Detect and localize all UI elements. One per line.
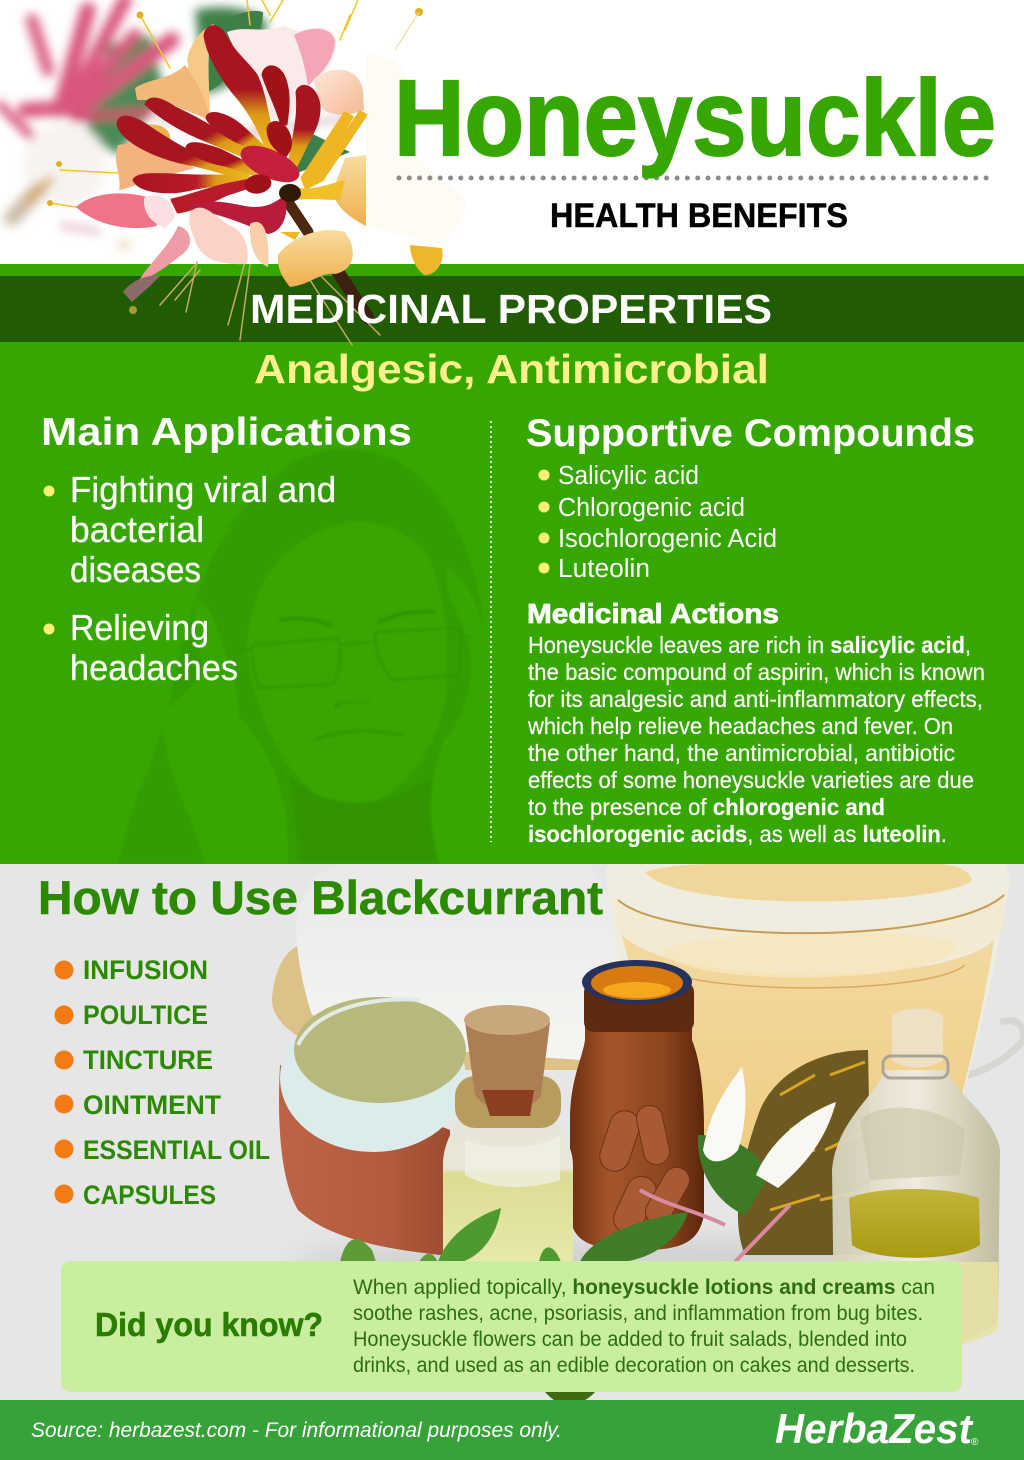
soft shadow: [290, 1238, 990, 1286]
bullet: fighting viral and bacterial diseases: [44, 469, 336, 590]
footer: [0, 1400, 1024, 1460]
callout text: drinks, and used as an edible decoration on cakes and desserts.: [353, 1353, 915, 1377]
illustration: remedies still life: [272, 864, 1024, 1406]
ointment jar: [279, 997, 466, 1256]
medicinal actions paragraph: for its analgesic and anti-inflammatory effects,: [528, 686, 983, 712]
pale curled petals: [189, 208, 248, 264]
peach petals right: [313, 70, 364, 115]
compound list: Salicylic acid: [558, 462, 699, 490]
corked oil bottle: [443, 1005, 573, 1262]
glass bottle with cork: [832, 1008, 1000, 1348]
stem and stamens: [50, 0, 380, 345]
leaf lower: [292, 128, 350, 175]
item: capsules: CAPSULES: [83, 1180, 216, 1210]
medicinal actions paragraph: the basic compound of aspirin, which is known: [528, 659, 985, 685]
pale petals top: [227, 26, 336, 120]
pink lower petals: [76, 193, 157, 228]
bullet: fighting viral and bacterial diseases: Fighting viral and: [70, 469, 336, 510]
leaf under callout: [545, 1392, 595, 1406]
heading: main applications: Main Applications: [41, 411, 412, 454]
panel: medicinal properties background: [0, 264, 1024, 864]
compound list: Isochlorogenic Acid: [558, 525, 777, 553]
blurred background honeysuckle flower: [0, 0, 345, 250]
medicinal actions paragraph: isochlorogenic acids, as well as luteolin.: [528, 821, 947, 847]
red flower buds: [118, 27, 319, 212]
cloth poultice: [296, 864, 625, 1060]
peach petals left: [116, 142, 195, 190]
compound list: [538, 462, 777, 583]
centre of flower: [279, 184, 301, 202]
medicinal actions paragraph: which help relieve headaches and fever. On: [527, 713, 953, 739]
callout text: [353, 1275, 935, 1377]
item: infusion: INFUSION: [83, 955, 208, 985]
item: poultice: POULTICE: [83, 1000, 208, 1030]
tea cup: [606, 864, 1024, 1240]
panel: how to use background: [0, 864, 1024, 1400]
source note: Source: herbazest.com - For informational purposes only.: [31, 1419, 562, 1442]
list: forms of use: [54, 955, 270, 1210]
item: essential oil: ESSENTIAL OIL: [83, 1135, 270, 1165]
orange lower petals: [278, 230, 353, 287]
illustration: woman with headache: [118, 450, 490, 864]
callout text: When applied topically, honeysuckle lotions and creams can: [353, 1275, 935, 1299]
central honeysuckle flower: [47, 0, 466, 345]
compound list: Chlorogenic acid: [558, 494, 745, 522]
bullet: fighting viral and bacterial diseases: diseases: [70, 549, 201, 590]
heading band: medicinal properties: [0, 276, 1024, 342]
stamen tips: [47, 8, 423, 314]
item: tincture: TINCTURE: [83, 1045, 213, 1075]
logo: herbazest: HerbaZest: [775, 1405, 974, 1452]
heading: medicinal actions: Medicinal Actions: [527, 598, 779, 629]
dotted divider: [399, 176, 992, 180]
heading: medicinal properties: MEDICINAL PROPERTIES: [250, 286, 772, 332]
panel: main applications: [41, 411, 412, 688]
orange right petals: [333, 155, 366, 226]
panel divider: [490, 421, 492, 842]
subtitle: HEALTH BENEFITS: [550, 197, 848, 235]
faded cream petals right: [366, 12, 466, 275]
callout heading: Did you know?: [95, 1306, 323, 1343]
callout: did you know: [61, 1261, 962, 1392]
item: ointment: OINTMENT: [83, 1090, 221, 1120]
callout text: Honeysuckle flowers can be added to fruit salads, blended into: [353, 1327, 907, 1351]
heading: how to use: How to Use Blackcurrant: [38, 871, 603, 924]
heading: supportive compounds: Supportive Compounds: [526, 412, 975, 455]
medicinal actions paragraph: to the presence of chlorogenic and: [528, 794, 885, 820]
herb bowl: [738, 1050, 872, 1255]
medicinal actions paragraph: the other hand, the antimicrobial, antibiotic: [528, 740, 955, 766]
compound list: Luteolin: [558, 555, 650, 583]
orange upper left petals: [165, 24, 214, 120]
panel: supportive compounds: [526, 412, 985, 847]
amber bottle with capsules: [570, 960, 704, 1250]
callout text: soothe rashes, acne, psoriasis, and inflammation from bug bites.: [353, 1301, 923, 1325]
bullet: relieving headaches: Relieving: [70, 607, 209, 648]
bullet: fighting viral and bacterial diseases: bacterial: [70, 509, 204, 550]
basket: [272, 945, 640, 1070]
medicinal actions paragraph: Honeysuckle leaves are rich in salicylic acid,: [528, 632, 971, 658]
subheading: analgesic, antimicrobial: Analgesic, Antimicrobial: [254, 346, 769, 392]
medicinal actions paragraph: [527, 632, 985, 847]
medicinal actions paragraph: effects of some honeysuckle varieties are due: [528, 767, 974, 793]
yellow tubes right: [302, 112, 366, 188]
honeysuckle sprig: [340, 1067, 836, 1262]
logo registered mark: ®: [971, 1437, 979, 1448]
bullet: relieving headaches: [44, 607, 238, 688]
bullet: relieving headaches: headaches: [70, 647, 238, 688]
leaf behind flower: [196, 11, 263, 92]
